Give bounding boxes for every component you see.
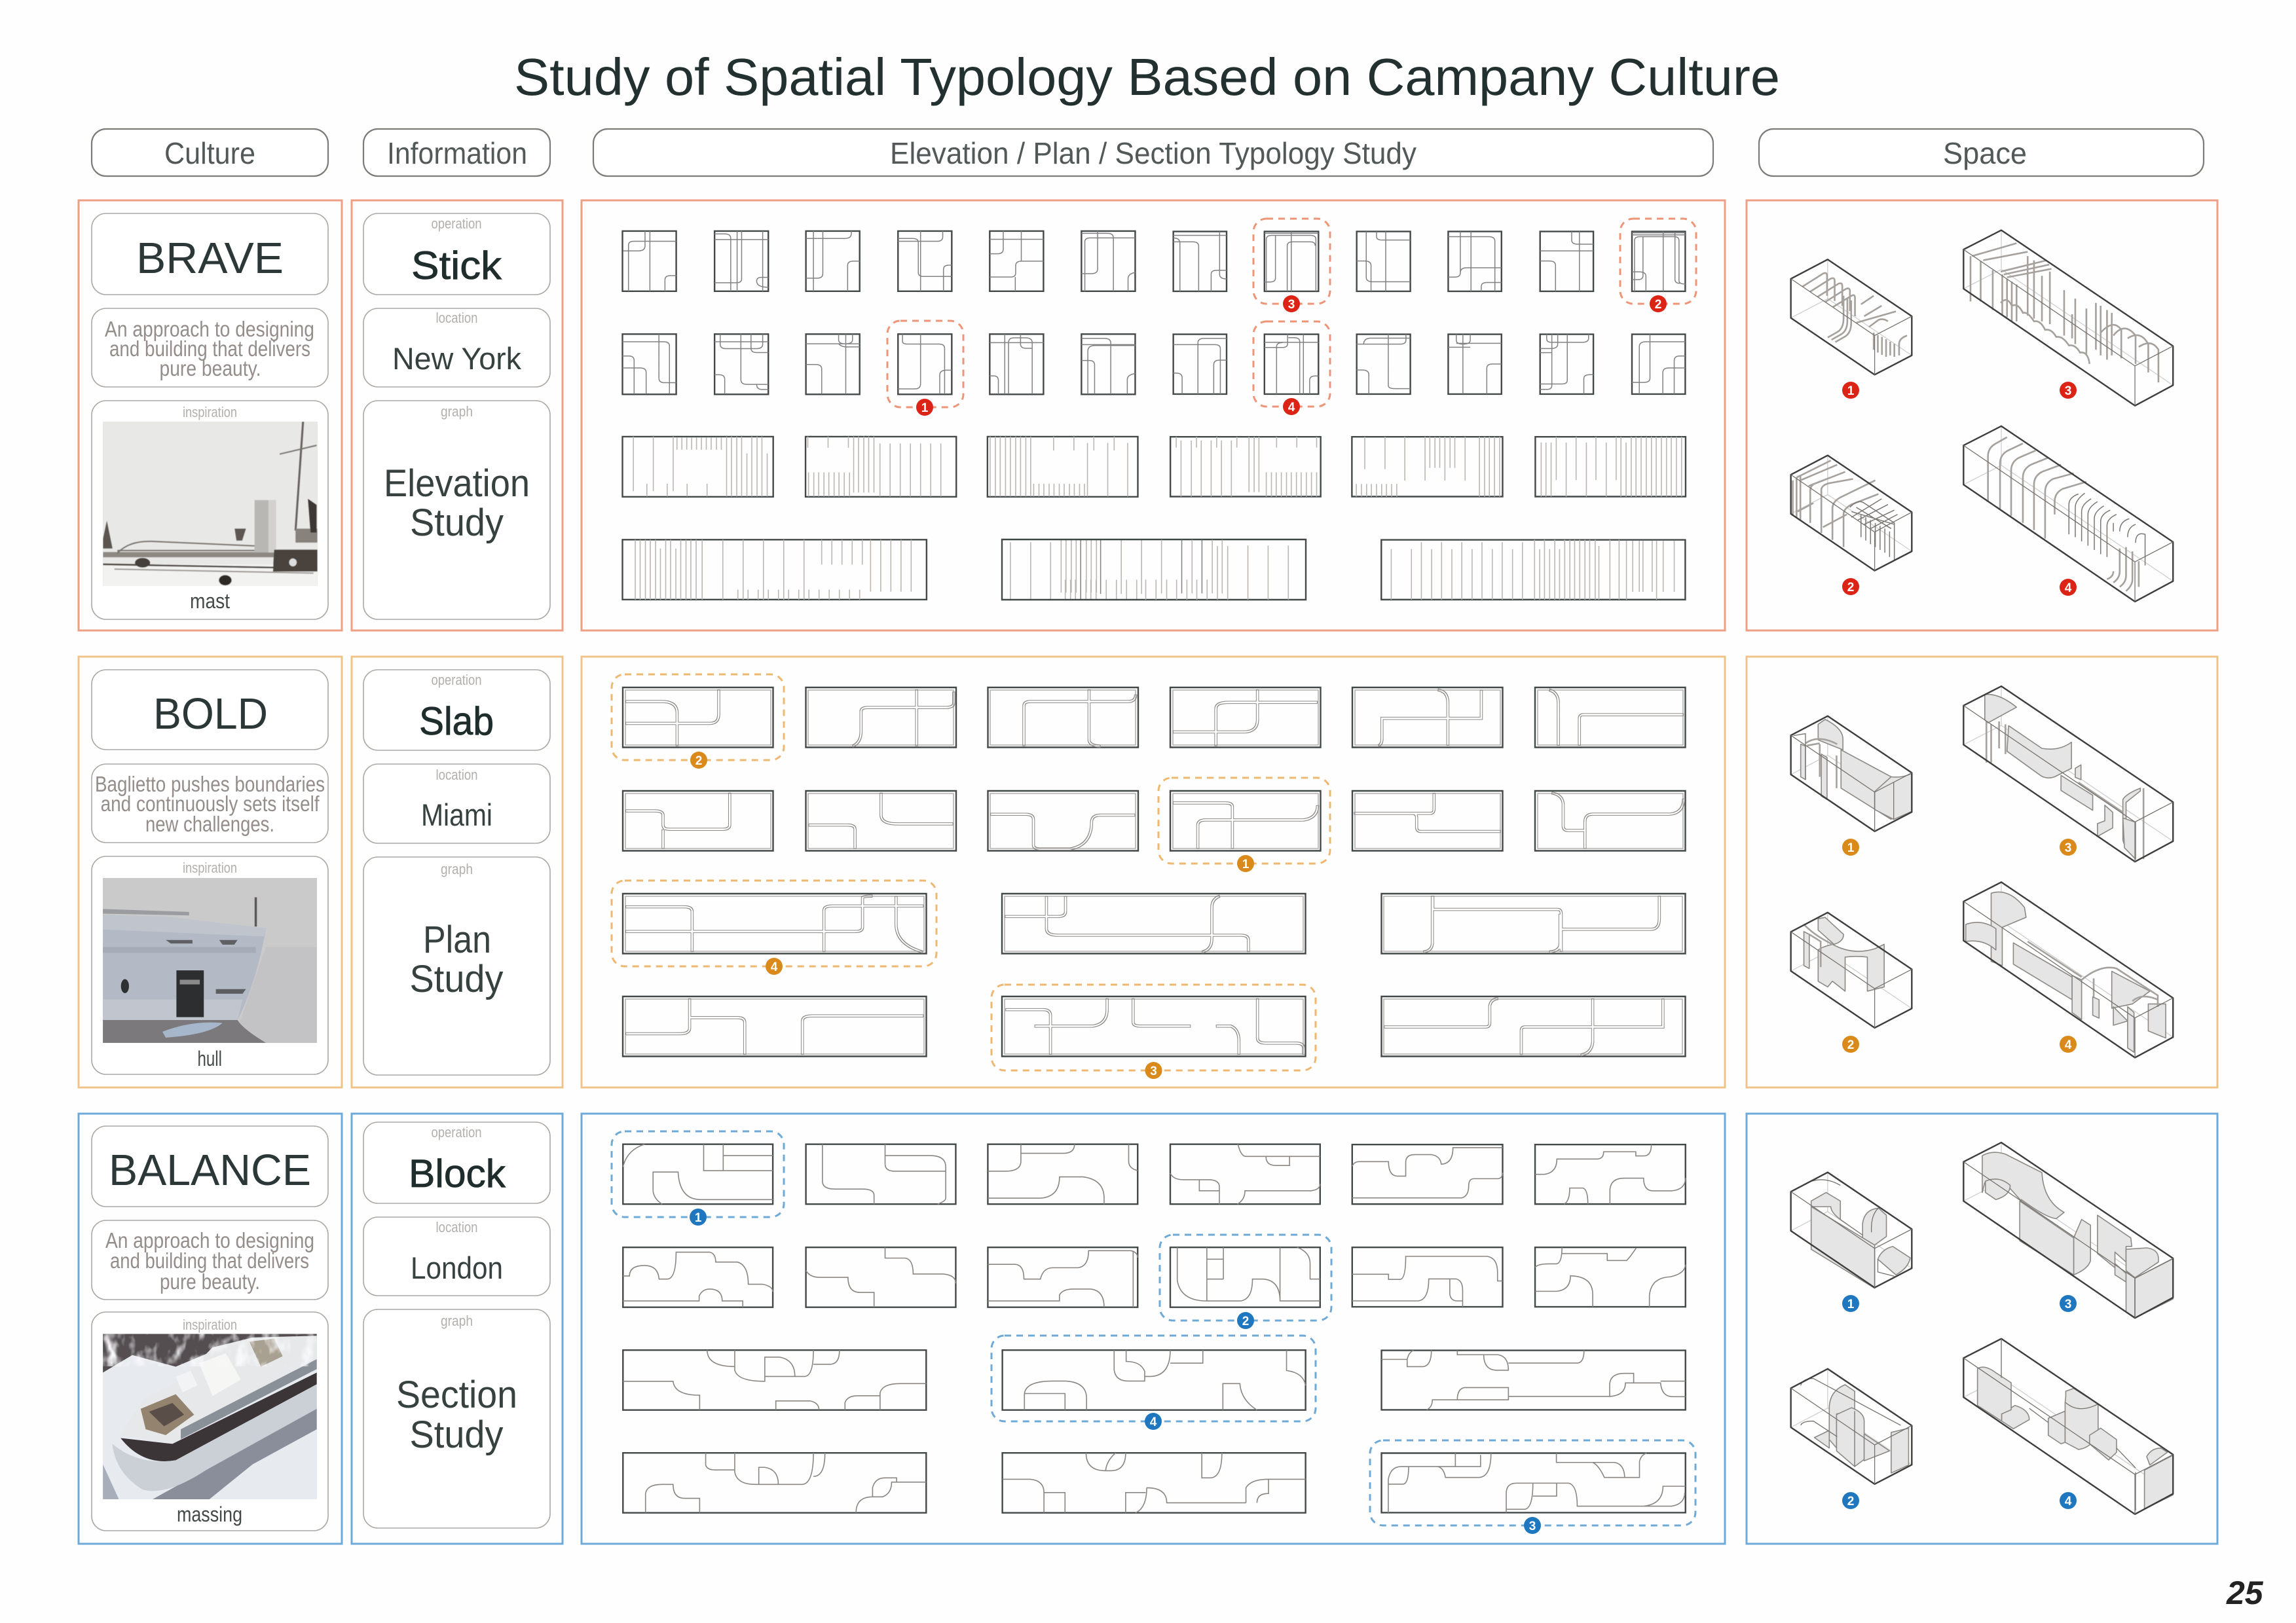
- plan tile 10: [1173, 803, 1318, 849]
- plan tile 9: [990, 814, 1135, 849]
- header: Elevation / Plan / Section Typology Study: Elevation / Plan / Section Typology Study: [890, 136, 1416, 170]
- card: inspiration hull: hull: [198, 1047, 222, 1070]
- plan long 1: [625, 896, 923, 952]
- badge 1: [1842, 382, 1859, 399]
- highlight 2: 2: [1242, 1315, 1249, 1328]
- section tile 5: [1352, 1144, 1502, 1204]
- card: graph Section Study: graph: [441, 1313, 473, 1329]
- card: inspiration mast: mast: [190, 589, 230, 613]
- elevation tile r1-9: [1357, 232, 1411, 291]
- card: graph Elevation Study: [363, 401, 550, 619]
- plan long 2: [1005, 896, 1248, 952]
- axonometric block 4: [1963, 1339, 2173, 1514]
- plan tile 8: [808, 793, 954, 849]
- card: operation Stick: [363, 213, 550, 295]
- badge 2: [1842, 1492, 1859, 1509]
- section tile 1: [623, 1144, 773, 1204]
- plan tile walls: [625, 689, 1684, 1055]
- card: graph Elevation Study: Elevation: [384, 462, 530, 505]
- section tile 7: [623, 1247, 773, 1307]
- badge 4: [2060, 1492, 2077, 1509]
- badge 4: [2060, 579, 2077, 596]
- highlight 1: [612, 1131, 784, 1226]
- axonometric slab 4: [1963, 882, 2173, 1057]
- axonometric block 2: [1791, 1369, 1912, 1484]
- elevation tile r1-7: [1174, 232, 1227, 291]
- card: operation Stick: Stick: [411, 244, 502, 287]
- section tile 8: [806, 1247, 955, 1307]
- card: BALANCE description: An approach to designing: [105, 1228, 314, 1252]
- elevation tile r2-5: [990, 334, 1043, 394]
- highlight 4: [612, 881, 936, 975]
- elevation tile r1-2: [714, 231, 768, 291]
- axonometric stick 2: [1791, 456, 1912, 571]
- card: operation Block: operation: [431, 1124, 482, 1140]
- section tile 11: [1352, 1247, 1502, 1307]
- card: location Miami: Miami: [421, 797, 492, 832]
- header: Culture: Culture: [164, 136, 255, 170]
- card: BRAVE: BRAVE: [136, 234, 284, 283]
- elevation tile r1-11: [1540, 232, 1593, 291]
- badge 2: 2: [1847, 1038, 1854, 1052]
- badge 4: [2060, 1036, 2077, 1053]
- elevation tiles left group: [623, 231, 1141, 600]
- badge 2: 2: [1847, 1495, 1854, 1508]
- header: Space: Space: [1943, 136, 2027, 170]
- highlight 2: 2: [1655, 298, 1661, 312]
- elevation tile r1-6: [1081, 231, 1135, 291]
- card: graph Section Study: [363, 1309, 550, 1528]
- plan tile 1: [625, 689, 718, 746]
- highlight 1: [887, 321, 963, 416]
- plan tile 11: [1354, 793, 1501, 831]
- panel: BOLD culture: [79, 657, 342, 1087]
- card: inspiration massing: massing: [177, 1503, 242, 1526]
- highlight 2: [1160, 1235, 1331, 1329]
- highlight 1: [1158, 778, 1330, 872]
- card: graph Plan Study: Plan: [423, 919, 491, 961]
- elevation strip r3-5: [1352, 437, 1502, 496]
- panel: Block information: [352, 1114, 563, 1544]
- card: operation Block: [363, 1122, 550, 1203]
- header: Space: [1759, 129, 2204, 176]
- card: graph Section Study: Section: [396, 1374, 517, 1416]
- elevation tile r2-10: [1448, 335, 1502, 394]
- highlight 4: 4: [771, 960, 778, 974]
- elevation strip r3-6: [1535, 437, 1686, 496]
- badge 1: [1842, 1295, 1859, 1312]
- panel: BALANCE culture: [79, 1114, 342, 1544]
- elevation strip r4-2 right part: [1146, 540, 1288, 600]
- elevation tile r1-4: [898, 231, 952, 291]
- panel: Block space axonometrics: [1747, 1114, 2217, 1544]
- section long 3: [623, 1453, 926, 1513]
- elevation strip r3-4: [1170, 437, 1321, 496]
- elevation tile r2-3: [806, 334, 860, 394]
- badge 1: 1: [1847, 841, 1855, 855]
- card: inspiration mast: [92, 401, 328, 619]
- card: BOLD description: [92, 764, 328, 843]
- card: location Miami: [363, 764, 550, 843]
- elevation tile r2-9: [1357, 335, 1411, 394]
- card: graph Plan Study: [363, 857, 550, 1075]
- panel: section typology: [582, 1114, 1725, 1544]
- plan long 4: [625, 998, 923, 1055]
- panel: Stick information: [352, 200, 563, 630]
- card: operation Block: Block: [409, 1152, 506, 1195]
- elevation tile r2-6: [1081, 334, 1135, 394]
- section long 6: [1382, 1453, 1686, 1512]
- elevation strip r4-3: [1381, 540, 1685, 600]
- card: graph Plan Study: graph: [441, 861, 473, 877]
- highlight 3: [1253, 219, 1330, 312]
- plan tile 2: [853, 689, 954, 746]
- section tiles right group: [1352, 1144, 1686, 1512]
- section tile 6: [1535, 1144, 1686, 1204]
- card: inspiration mast: inspiration: [183, 404, 237, 420]
- photo: yacht from above: [103, 1334, 317, 1499]
- card: operation Slab: Slab: [419, 699, 494, 743]
- title: Study of Spatial Typology Based on Campany Culture: [514, 48, 1780, 106]
- elevation tile r2-4: [898, 334, 952, 394]
- badge 2: [1842, 1036, 1859, 1053]
- panel: BRAVE culture: [79, 200, 342, 630]
- elevation strip r3-3: [988, 437, 1138, 497]
- elevation tiles right group: [1146, 232, 1686, 600]
- card: BALANCE description: and building that delivers: [110, 1249, 309, 1273]
- card: BALANCE description: pure beauty.: [160, 1269, 260, 1294]
- section tile 10: [1170, 1247, 1320, 1307]
- highlight 3: [1370, 1440, 1695, 1534]
- card: location New York: location: [436, 310, 478, 326]
- highlight 1: 1: [695, 1211, 702, 1225]
- highlight 4: [1253, 321, 1330, 415]
- plan long 3: [1423, 896, 1659, 952]
- axonometric block 3: [1963, 1142, 2173, 1318]
- elevation tile r2-2: [714, 334, 768, 394]
- elevation strip r3-1: [623, 437, 773, 497]
- highlight 3: 3: [1529, 1520, 1536, 1533]
- plan tile 12: [1551, 793, 1684, 848]
- header: Culture: [92, 129, 328, 176]
- badge 1: [1842, 839, 1859, 856]
- card: location London: location: [436, 1219, 478, 1235]
- elevation tile r1-10: [1448, 232, 1502, 291]
- highlight 2: 2: [695, 754, 702, 768]
- highlight 1: 1: [921, 401, 929, 415]
- elevation tile r2-11: [1540, 335, 1593, 394]
- panel: Stick space axonometrics: [1747, 200, 2217, 630]
- card: graph Elevation Study: graph: [441, 403, 473, 420]
- card: location Miami: location: [436, 767, 478, 783]
- card: inspiration massing: [92, 1312, 328, 1531]
- card: location New York: New York: [392, 341, 521, 376]
- panel: plan typology: [582, 657, 1725, 1087]
- badge 2: 2: [1847, 581, 1854, 594]
- section long 2: [1003, 1350, 1306, 1410]
- photo: yacht hull: [103, 878, 317, 1043]
- elevation tile r2-1: [623, 334, 676, 394]
- section long 4: [1003, 1453, 1306, 1513]
- card: operation Slab: [363, 670, 550, 750]
- section tiles left group: [623, 1144, 1320, 1513]
- card: graph Section Study: Study: [410, 1413, 503, 1456]
- highlight 4: [991, 1336, 1316, 1430]
- plan tile 4: [1173, 689, 1318, 746]
- axonometric stick 3: [1963, 230, 2173, 406]
- plan long 5: [1005, 998, 1304, 1055]
- section tile 12: [1535, 1247, 1686, 1307]
- card: BRAVE description: [92, 308, 328, 387]
- card: BOLD description: Baglietto pushes boundaries: [95, 772, 325, 796]
- section long 1: [623, 1350, 926, 1410]
- plan tile 6: [1549, 690, 1684, 746]
- header: Information: Information: [387, 136, 527, 170]
- section tile 3: [988, 1144, 1138, 1204]
- card: BRAVE: [92, 213, 328, 295]
- plan tile 3: [1024, 689, 1136, 746]
- axonometric block 1: [1791, 1173, 1912, 1288]
- card: BALANCE description: [92, 1220, 328, 1300]
- elevation tile r2-8: [1265, 335, 1318, 394]
- highlight 2: [1620, 219, 1696, 312]
- panel: Slab space axonometrics: [1747, 657, 2217, 1087]
- section tile 2: [806, 1144, 955, 1204]
- plan tile 5: [1379, 690, 1481, 746]
- axonometric slab 1: [1791, 716, 1912, 831]
- header: Information: [363, 129, 550, 176]
- badge 3: [2060, 839, 2077, 856]
- page number: 25: [2226, 1575, 2264, 1611]
- card: inspiration hull: [92, 856, 328, 1074]
- elevation tile r1-1: [623, 231, 676, 291]
- card: BALANCE: BALANCE: [109, 1146, 311, 1195]
- axonometric slab 2: [1791, 913, 1912, 1028]
- card: BRAVE description: pure beauty.: [160, 356, 261, 380]
- card: BRAVE description: and building that delivers: [109, 337, 310, 361]
- elevation strip r4-2 left part: [1010, 539, 1141, 600]
- elevation tile r1-5: [990, 231, 1043, 291]
- plan tile frames: [623, 687, 1686, 1057]
- badge 3: [2060, 1295, 2077, 1312]
- badge 4: 4: [2065, 581, 2072, 595]
- badge 3: 3: [2065, 1298, 2071, 1311]
- badge 2: [1842, 578, 1859, 595]
- card: inspiration massing: inspiration: [183, 1317, 237, 1333]
- card: operation Stick: operation: [431, 215, 482, 232]
- axonometric stick 4: [1963, 426, 2173, 602]
- section tile 9: [988, 1247, 1138, 1307]
- card: location London: [363, 1217, 550, 1296]
- elevation tile r1-12: [1632, 232, 1685, 291]
- card: BALANCE: [92, 1126, 328, 1207]
- elevation tile r2-7: [1174, 335, 1227, 394]
- card: BOLD: [92, 670, 328, 750]
- photo: steam yacht with mast: [103, 422, 318, 586]
- plan tile 7: [625, 793, 730, 849]
- badge 3: 3: [2065, 841, 2071, 855]
- section long 5: [1382, 1351, 1686, 1410]
- highlight 3: 3: [1288, 298, 1295, 312]
- panel: elevation typology: [582, 200, 1725, 630]
- card: inspiration hull: inspiration: [183, 860, 237, 876]
- card: graph Plan Study: Study: [410, 958, 503, 1000]
- elevation tile r1-8: [1265, 232, 1318, 291]
- elevation tile r2-12: [1632, 335, 1685, 394]
- axonometric slab 3: [1963, 686, 2173, 862]
- card: operation Slab: operation: [431, 672, 482, 688]
- highlight 1: 1: [1242, 858, 1250, 871]
- card: location London: London: [411, 1250, 503, 1285]
- card: BOLD description: new challenges.: [145, 812, 274, 836]
- badge 1: 1: [1847, 384, 1855, 398]
- header: Elevation / Plan / Section Typology Study: [593, 129, 1713, 176]
- elevation strip r4-1: [623, 539, 927, 600]
- elevation tile r1-3: [806, 231, 860, 291]
- badge 3: 3: [2065, 384, 2071, 398]
- badge 1: 1: [1847, 1298, 1855, 1311]
- card: graph Elevation Study: Study: [410, 501, 504, 544]
- badge 4: 4: [2065, 1495, 2072, 1508]
- highlight 4: 4: [1150, 1415, 1157, 1429]
- highlight 3: 3: [1150, 1065, 1157, 1078]
- highlight 2: [612, 674, 784, 769]
- card: location New York: [363, 308, 550, 387]
- badge 3: [2060, 382, 2077, 399]
- badge 4: 4: [2065, 1038, 2072, 1052]
- card: BOLD description: and continuously sets itself: [101, 792, 320, 816]
- axonometric stick 1: [1791, 259, 1912, 374]
- card: BOLD: BOLD: [153, 689, 268, 739]
- panel: Slab information: [352, 657, 563, 1087]
- frame of elevation strip r4-2: [1002, 539, 1306, 600]
- elevation strip r3-2: [805, 437, 956, 497]
- plan long 6: [1384, 998, 1663, 1055]
- highlight 3: [991, 985, 1316, 1079]
- highlight 4: 4: [1288, 401, 1295, 414]
- section tile 4: [1170, 1144, 1320, 1204]
- card: BRAVE description: An approach to designing: [105, 317, 314, 341]
